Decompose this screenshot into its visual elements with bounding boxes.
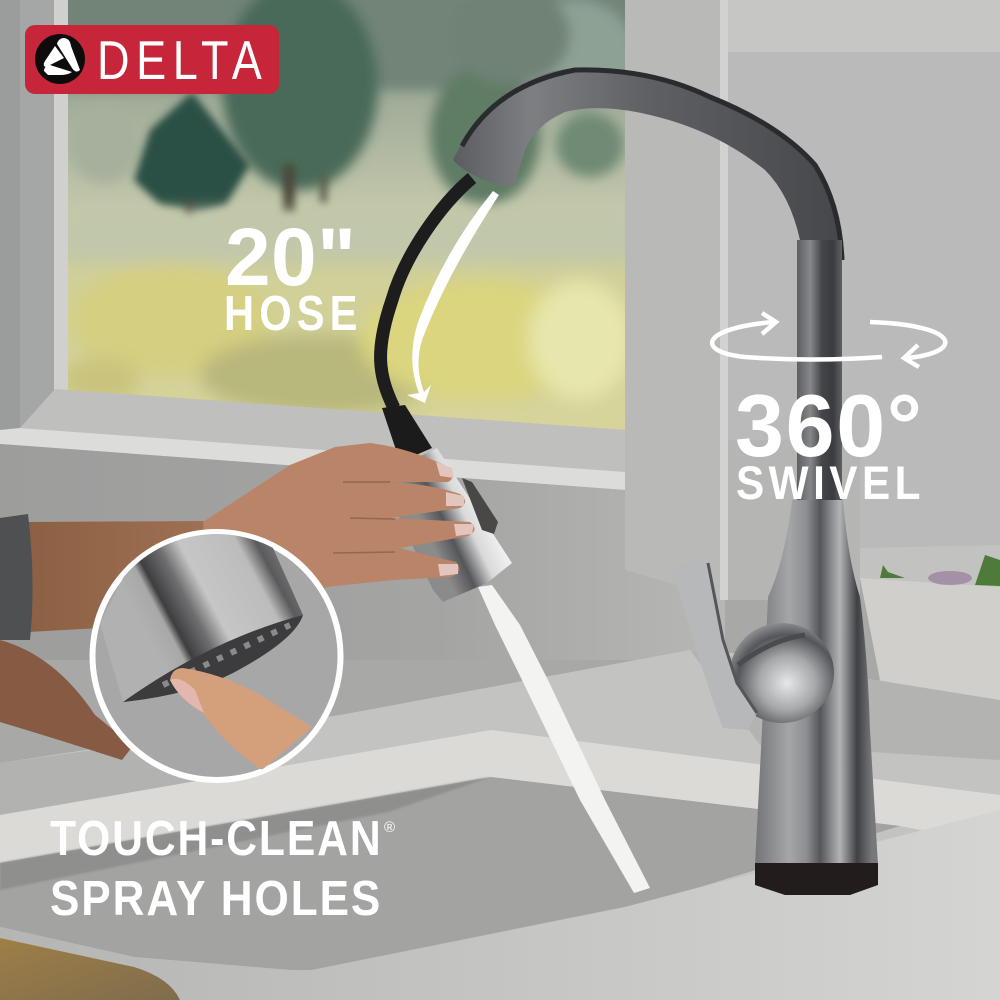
cutting board: [0, 938, 180, 1000]
spray holes label: ®: [384, 819, 395, 836]
window frame and sill: [0, 0, 728, 660]
nail: [170, 679, 204, 713]
lower hand on sink: [0, 640, 132, 760]
inset circle: touch-clean spray holes: [90, 529, 344, 783]
spray holes label: TOUCH-CLEAN: [50, 810, 381, 866]
window view: trees and meadow: [60, 0, 640, 430]
logo: Delta: DELTA: [97, 29, 262, 91]
fingernails: [436, 462, 474, 576]
sprayer end: [100, 530, 303, 702]
spout arc: [453, 68, 842, 370]
black base ring: [755, 863, 878, 895]
logo mark: [35, 34, 85, 84]
logo: Delta: [25, 25, 279, 94]
sprayer head: [380, 405, 512, 602]
hose label: 20": [225, 212, 356, 303]
water stream: [478, 585, 650, 893]
knuckle shading: [333, 482, 395, 553]
pull-out hose: [381, 178, 472, 408]
hose label: HOSE: [224, 286, 357, 341]
tapered base: [755, 500, 878, 865]
spray face: [123, 615, 303, 702]
swivel label: SWIVEL: [736, 458, 921, 510]
faucet body: [453, 68, 878, 895]
arrow: hose extension: [407, 191, 499, 403]
forearm and sleeve: [0, 514, 340, 640]
spray holes label: [50, 810, 395, 926]
spray holes label: SPRAY HOLES: [50, 871, 380, 926]
counter and sink: [0, 650, 1000, 1000]
swivel label: 360°: [735, 376, 922, 475]
handle hub: [730, 623, 834, 723]
sink basin: [0, 777, 900, 970]
bowl with salad and cables: [860, 545, 1000, 738]
fingertip: [170, 668, 312, 770]
hand holding sprayer: [203, 443, 475, 600]
arrow: rotation: [712, 313, 945, 367]
riser column: [797, 240, 842, 510]
front counter: [0, 810, 1000, 1000]
hose label: [224, 212, 357, 341]
lever: [672, 560, 757, 730]
sink rim: [0, 730, 1000, 863]
